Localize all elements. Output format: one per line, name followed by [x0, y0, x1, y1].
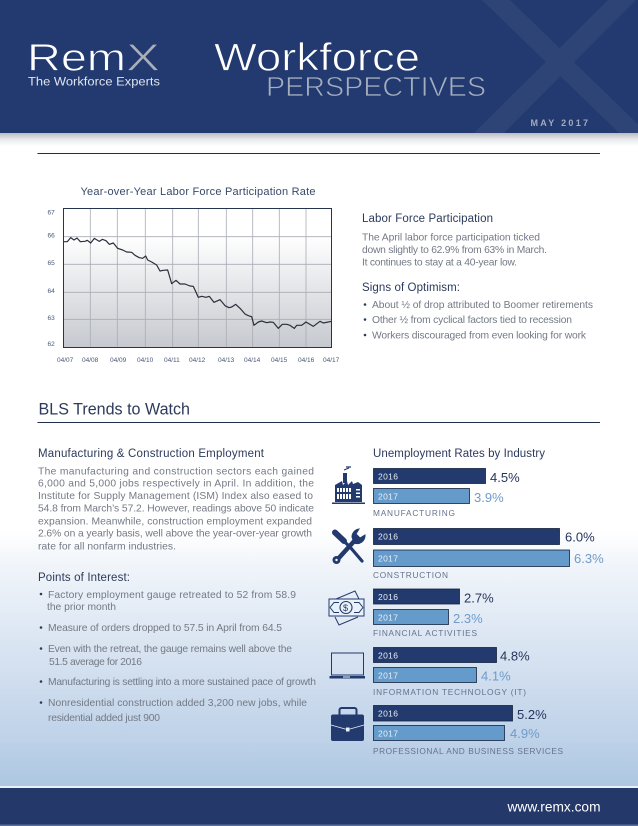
bar group: professional and business services: PROFESSIONAL AND BUSINESS SERVICES — [373, 746, 563, 756]
x axis labels: 04/11 — [164, 357, 180, 364]
text block: manufacturing and construction: 54.8 from March’s 57.2. However, readings above 50 indicate — [38, 504, 314, 514]
bar group: professional and business services: 2016 — [378, 708, 398, 718]
bar group: construction: 6.0% — [565, 530, 595, 544]
x axis labels: 04/13 — [218, 357, 235, 364]
text block: points of interest: Nonresidential construction added 3,200 new jobs, while — [48, 698, 307, 709]
bar group: information technology: 2016 — [378, 650, 398, 660]
icon: briefcase — [331, 708, 364, 741]
icon: wrench and screwdriver — [332, 529, 365, 564]
bar group: financial activities: 2.7% — [464, 590, 494, 606]
x axis labels: 04/17 — [323, 357, 340, 364]
x axis labels: 04/10 — [137, 357, 154, 364]
bar group: financial activities: 2016 — [378, 592, 398, 602]
icon: money — [329, 591, 364, 625]
bar group: construction: 2016 — [378, 532, 398, 542]
text block: points of interest — [38, 572, 316, 724]
text block: points of interest: 51.5 average for 2016 — [49, 657, 142, 668]
text block: points of interest: Factory employment gauge retreated to 52 from 58.9 — [48, 590, 296, 601]
y axis labels: 64 — [48, 288, 55, 295]
logo: The Workforce Experts — [28, 76, 160, 88]
text block: manufacturing and construction: 2.6% on a yearly basis, well above the year-over-year growth — [38, 528, 312, 540]
bar group: professional and business services: 5.2% — [517, 707, 547, 722]
bar group: information technology: INFORMATION TECHNOLOGY (IT) — [373, 687, 526, 697]
bar group: construction: 6.3% — [574, 551, 604, 566]
text block: signs of optimism: Signs of Optimism: — [362, 282, 460, 294]
icon: laptop — [330, 653, 365, 678]
data line — [63, 238, 332, 328]
x axis labels: 04/16 — [298, 357, 315, 364]
chart title: Year-over-Year Labor Force Participation Rate — [80, 186, 316, 198]
watermark X — [474, 0, 638, 133]
bar group: professional and business services: 4.9% — [510, 726, 540, 741]
bar group: construction: CONSTRUCTION — [373, 570, 448, 580]
text block: points of interest: Measure of orders dropped to 57.5 in April from 64.5 — [48, 623, 282, 634]
text block: labor force participation — [362, 213, 547, 268]
bar group: information technology: 4.1% — [481, 668, 511, 684]
bar group: information technology: 4.8% — [500, 648, 530, 664]
bar group: professional and business services — [373, 706, 563, 756]
line chart: labor force participation — [48, 186, 340, 364]
x axis labels: 04/08 — [82, 357, 99, 364]
y axis labels: 65 — [48, 260, 55, 267]
bar group: construction — [373, 528, 604, 580]
title: Workforce: Workforce — [214, 36, 420, 80]
x axis labels: 04/15 — [271, 357, 288, 364]
text block: labor force participation: It continues to stay at a 40-year low. — [362, 258, 517, 268]
bar group: information technology: 2017 — [378, 670, 398, 680]
bar group: manufacturing: 2017 — [378, 492, 398, 502]
y axis labels: 62 — [48, 341, 55, 348]
logo: X — [126, 38, 160, 80]
bar group: manufacturing: MANUFACTURING — [373, 508, 455, 518]
x axis labels — [57, 357, 340, 364]
text block: manufacturing and construction — [38, 448, 314, 552]
bar group: financial activities: 2017 — [378, 612, 398, 622]
text block: signs of optimism — [362, 282, 593, 342]
text block: points of interest: the prior month — [47, 602, 116, 613]
y axis labels — [48, 210, 55, 348]
header banner — [0, 0, 638, 133]
text block: manufacturing and construction: expansion. Meanwhile, construction employment expanded — [38, 516, 312, 528]
bar group: financial activities: FINANCIAL ACTIVITIES — [373, 628, 477, 638]
text block: manufacturing and construction: Institute for Supply Management (ISM) Index also eased to — [38, 491, 313, 502]
subtitle: Perspectives: PERSPECTIVES — [266, 71, 486, 102]
section heading: BLS Trends to Watch: BLS Trends to Watch — [38, 400, 190, 418]
text block: labor force participation: The April labor force participation ticked — [362, 232, 540, 244]
chart heading: unemployment rates: Unemployment Rates by Industry — [373, 448, 545, 460]
text block: manufacturing and construction: The manufacturing and construction sectors each gained — [38, 466, 314, 478]
x axis labels: 04/14 — [244, 357, 261, 364]
bar group: manufacturing — [373, 468, 520, 518]
icon: factory — [332, 467, 365, 504]
text block: signs of optimism: Workers discouraged from even looking for work — [372, 330, 587, 342]
text block: points of interest: residential added just 900 — [48, 713, 160, 724]
text block: points of interest: Manufacturing is settling into a more sustained pace of growth — [48, 677, 316, 688]
bar group: construction: 2017 — [378, 554, 398, 564]
footer band — [0, 786, 638, 826]
x axis labels: 04/07 — [57, 357, 74, 364]
logo — [27, 38, 160, 88]
x axis labels: 04/12 — [189, 357, 206, 364]
text block: labor force participation: down slightly to 62.9% from 63% in March. — [362, 245, 547, 256]
y axis labels: 67 — [48, 210, 55, 216]
bar group: financial activities — [373, 589, 494, 638]
text block: points of interest: Points of Interest: — [38, 572, 130, 584]
text block: signs of optimism: About ½ of drop attributed to Boomer retirements — [372, 300, 593, 311]
text block: manufacturing and construction: rate for all nonfarm industries. — [38, 542, 176, 552]
bar group: information technology — [373, 648, 530, 697]
text block: manufacturing and construction: 6,000 and 5,000 jobs respectively in April. In addition, the — [38, 478, 314, 490]
text block: labor force participation: Labor Force Participation — [362, 213, 493, 225]
text block: points of interest: Even with the retreat, the gauge remains well above the — [48, 644, 292, 655]
y axis labels: 63 — [48, 315, 55, 322]
bar group: manufacturing: 2016 — [378, 472, 398, 482]
bar group: professional and business services: 2017 — [378, 728, 398, 738]
bar group: manufacturing: 4.5% — [490, 470, 520, 485]
y axis labels: 66 — [48, 232, 55, 240]
bar group: manufacturing: 3.9% — [474, 490, 504, 505]
x axis labels: 04/09 — [110, 357, 127, 364]
text block: manufacturing and construction: Manufacturing & Construction Employment — [38, 448, 265, 460]
date: MAY 2017 — [530, 118, 588, 128]
website: www.remx.com — [506, 800, 600, 814]
icon: money: $ — [343, 603, 348, 613]
text block: signs of optimism: Other ½ from cyclical factors tied to recession — [372, 315, 572, 326]
logo: Rem — [27, 38, 126, 80]
bar group: financial activities: 2.3% — [453, 611, 483, 626]
